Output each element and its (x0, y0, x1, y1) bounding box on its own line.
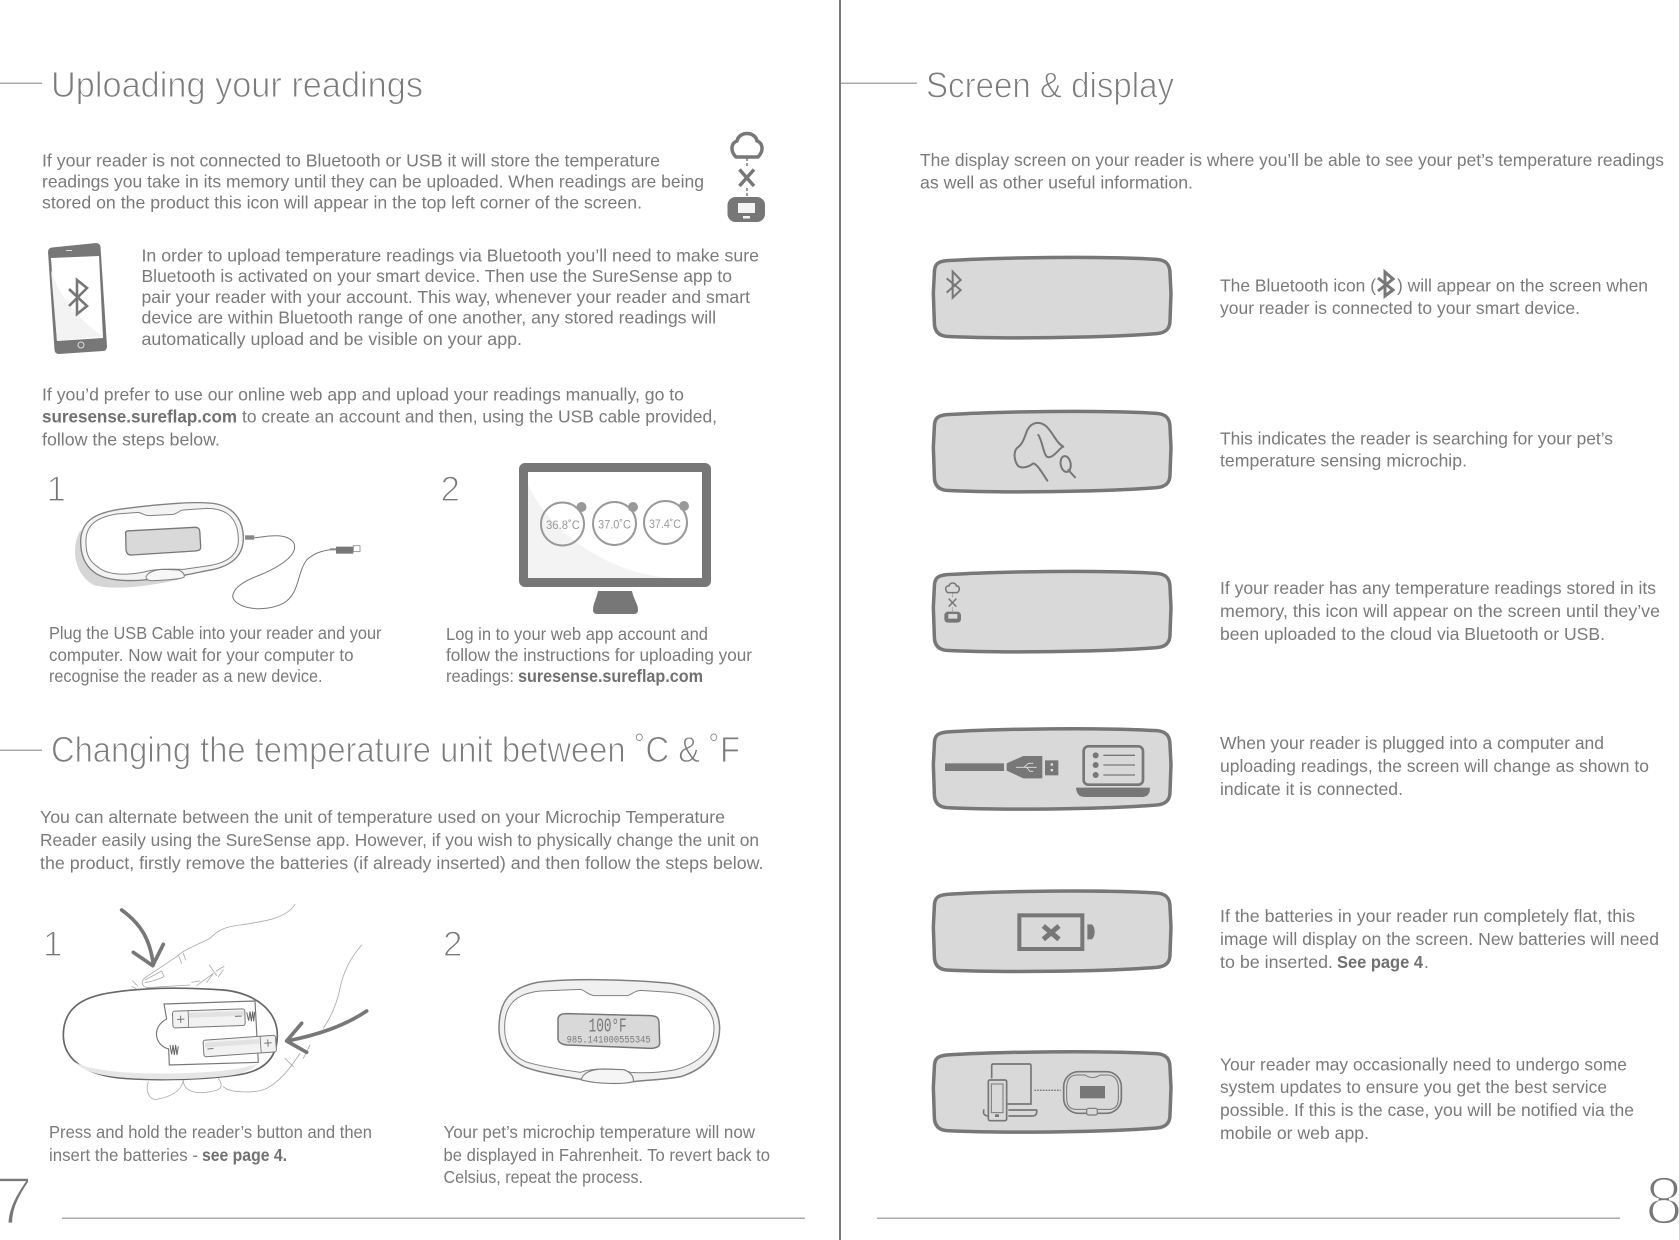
text block: reader memory: readings you take in its memory until they can be uploaded. When readings are being (42, 172, 704, 192)
illustration: hand inserting batteries (63, 904, 367, 1099)
text block: stored readings: memory, this icon will appear on the screen until they’ve (1220, 601, 1660, 621)
text block: web app upload: follow the steps below. (42, 430, 220, 450)
caption: step 1 USB: Plug the USB Cable into your reader and your (49, 623, 382, 643)
illustration: reader with USB cable (75, 503, 360, 609)
text block: reader memory: stored on the product this icon will appear in the top left corner of the screen. (42, 192, 642, 212)
caption: step 1 batteries (49, 1122, 372, 1165)
caption: step 2 fahrenheit (444, 1122, 770, 1187)
text block: stored readings (1220, 578, 1660, 644)
text block: flat battery: image will display on the screen. New batteries will need (1220, 929, 1659, 949)
caption: step 1 batteries: insert the batteries - (49, 1145, 198, 1165)
text block: USB connected: indicate it is connected. (1220, 779, 1403, 799)
text block: system update: system updates to ensure you get the best service (1220, 1077, 1607, 1097)
text block: flat battery: to be inserted. (1220, 952, 1333, 972)
icon: smartphone with bluetooth (48, 243, 107, 354)
illustration: reader showing Fahrenheit: 985.141000555345 (567, 1035, 651, 1047)
screen: flat battery (933, 891, 1171, 971)
text block: searching: This indicates the reader is searching for your pet’s (1220, 428, 1613, 448)
illustration: monitor with temperature readings: 37.0˚C (598, 518, 631, 532)
text block: searching: temperature sensing microchip. (1220, 450, 1467, 470)
illustration: reader showing Fahrenheit: 100°F (589, 1016, 627, 1038)
text block: alternate units: the product, firstly remove the batteries (if already inserted) and then follow the steps below. (40, 853, 764, 873)
text block: web app upload: suresense.sureflap.com (42, 406, 237, 426)
illustration: monitor with temperature readings: 37.4˚C (649, 517, 681, 531)
screen: bluetooth (933, 257, 1171, 338)
text block: flat battery: See page 4 (1337, 952, 1423, 972)
heading: changing temperature unit: Changing the temperature unit between ˚C & ˚F (51, 729, 740, 770)
text block: flat battery (1220, 906, 1659, 972)
text block: web app upload: to create an account and then, using the USB cable provided, (242, 406, 717, 426)
text block: USB connected (1220, 733, 1649, 799)
text block: bluetooth upload: automatically upload and be visible on your app. (142, 329, 522, 349)
text block: alternate units: Reader easily using the SureSense app. However, if you wish to physically change the unit on (40, 830, 759, 850)
text block: web app upload: If you’d prefer to use our online web app and upload your readings manually, go to (42, 384, 684, 404)
text block: display intro: The display screen on your reader is where you’ll be able to see your pet’s temperature readings (920, 150, 1664, 170)
text block: reader memory (42, 150, 704, 212)
text block: bluetooth icon: The Bluetooth icon ( (1220, 276, 1376, 296)
text block: flat battery: If the batteries in your reader run completely flat, this (1220, 906, 1635, 926)
text block: USB connected: uploading readings, the screen will change as shown to (1220, 756, 1649, 776)
illustration: monitor with temperature readings (519, 463, 711, 614)
icon: cloud upload pending (728, 134, 765, 222)
caption: step 1 batteries: see page 4. (202, 1145, 287, 1165)
footer rule: left (62, 1218, 805, 1219)
text block: searching (1220, 428, 1613, 470)
step number 1: USB: 1 (46, 470, 66, 509)
caption: step 2 fahrenheit: Celsius, repeat the process. (444, 1167, 643, 1187)
text block: stored readings: If your reader has any temperature readings stored in its (1220, 578, 1656, 598)
panel: right page (841, 64, 1679, 1239)
heading: uploading your readings: Uploading your readings (51, 64, 423, 105)
caption: step 2 web app: follow the instructions for uploading your (446, 645, 752, 665)
step number 1: batteries: 1 (43, 925, 62, 964)
text block: alternate units (40, 807, 764, 873)
screen: system update (933, 1052, 1171, 1132)
heading: screen and display: Screen & display (926, 64, 1174, 106)
caption: step 2 web app: suresense.sureflap.com (518, 666, 703, 686)
text block: bluetooth upload (142, 246, 759, 349)
text block: stored readings: been uploaded to the cloud via Bluetooth or USB. (1220, 624, 1605, 644)
screen: searching for microchip (933, 411, 1171, 492)
text block: flat battery: . (1424, 952, 1429, 972)
footer rule: right (877, 1218, 1620, 1219)
caption: step 1 USB (49, 623, 382, 686)
caption: step 1 batteries: Press and hold the reader’s button and then (49, 1122, 372, 1142)
screen: USB connected (933, 729, 1171, 809)
step number 2: web app: 2 (440, 470, 460, 509)
text block: display intro (920, 150, 1664, 192)
caption: step 1 USB: recognise the reader as a new device. (49, 666, 322, 686)
caption: step 2 fahrenheit: be displayed in Fahrenheit. To revert back to (444, 1145, 770, 1165)
caption: step 2 web app: readings: (446, 666, 514, 686)
illustration: reader showing Fahrenheit (499, 980, 720, 1083)
text block: system update (1220, 1054, 1634, 1143)
panel: left page (0, 64, 805, 1239)
text block: system update: possible. If this is the case, you will be notified via the (1220, 1100, 1634, 1120)
caption: step 1 USB: computer. Now wait for your computer to (49, 645, 354, 665)
screen: stored readings (933, 571, 1171, 652)
text block: alternate units: You can alternate between the unit of temperature used on your Microchip Temperature (40, 807, 725, 827)
text block: bluetooth icon: ) will appear on the screen when (1397, 276, 1648, 296)
text block: bluetooth icon (1220, 272, 1648, 318)
text block: bluetooth upload: In order to upload temperature readings via Bluetooth you’ll need to make sure (142, 246, 759, 266)
text block: bluetooth icon: your reader is connected to your smart device. (1220, 298, 1580, 318)
caption: step 2 web app: Log in to your web app account and (446, 624, 708, 644)
illustration: monitor with temperature readings: 36.8˚C (546, 518, 580, 532)
text block: reader memory: If your reader is not connected to Bluetooth or USB it will store the temperature (42, 150, 660, 170)
text block: web app upload (42, 384, 717, 450)
text block: display intro: as well as other useful information. (920, 172, 1193, 192)
text block: bluetooth upload: pair your reader with your account. This way, whenever your reader and smart (142, 287, 750, 307)
caption: step 2 fahrenheit: Your pet’s microchip temperature will now (444, 1122, 755, 1142)
text block: bluetooth upload: Bluetooth is activated on your smart device. Then use the SureSense app to (142, 266, 732, 286)
step number 2: fahrenheit: 2 (443, 925, 462, 964)
text block: bluetooth upload: device are within Bluetooth range of one another, any stored readings will (142, 308, 716, 328)
text block: system update: Your reader may occasionally need to undergo some (1220, 1054, 1627, 1074)
caption: step 2 web app (446, 624, 752, 686)
text block: system update: mobile or web app. (1220, 1123, 1369, 1143)
text block: USB connected: When your reader is plugged into a computer and (1220, 733, 1604, 753)
